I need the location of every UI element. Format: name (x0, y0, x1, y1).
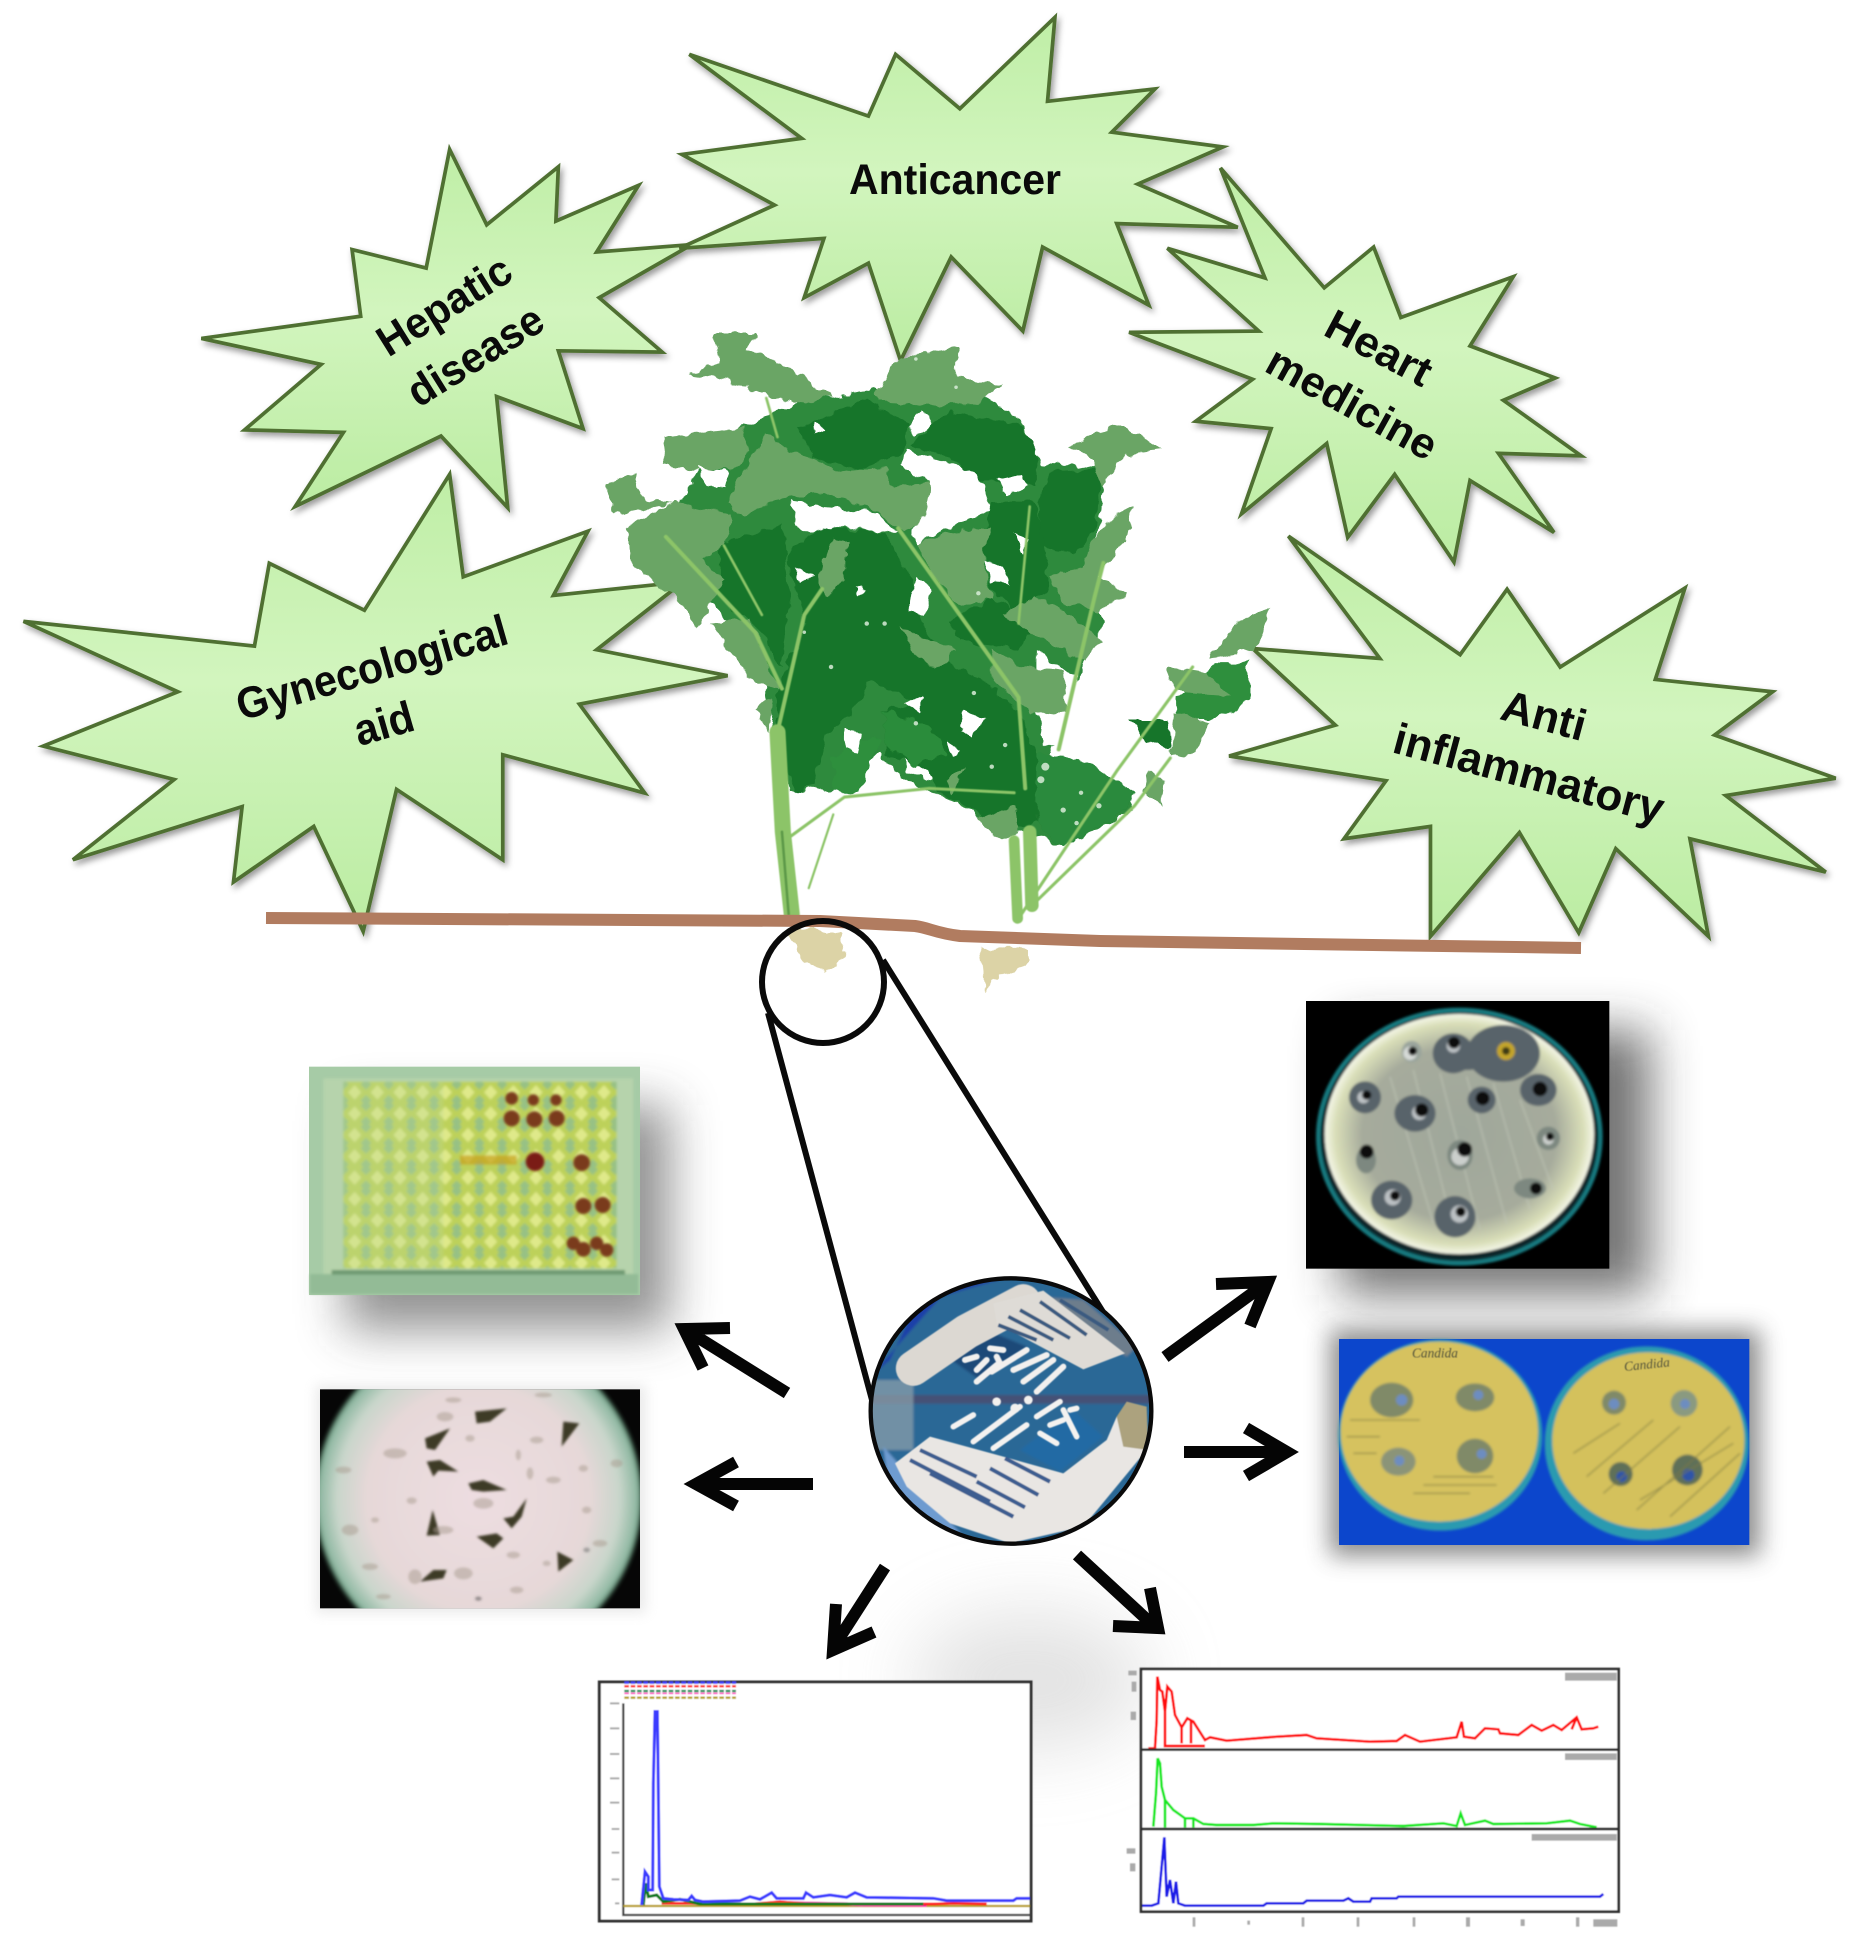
arrow to shrimp assay (696, 1462, 813, 1506)
lens line left (768, 1013, 872, 1400)
starburst: Heart medicine (1129, 168, 1581, 562)
handwritten plate labels (1412, 1345, 1671, 1374)
photo: well plate (309, 1067, 670, 1330)
starburst: Hepatic disease (201, 149, 692, 508)
peak table legend (624, 1683, 736, 1698)
starburst: Anticancer (679, 17, 1238, 361)
starburst: Gynecological aid (23, 474, 728, 931)
label: Heart medicine: Heart (1317, 301, 1440, 397)
starburst: Anti inflammatory (1229, 536, 1836, 936)
zoom lens lines (762, 921, 1103, 1400)
green trace (1153, 1758, 1597, 1827)
label: Hepatic disease: Hepatic (368, 246, 521, 366)
bacterial streaks (913, 1302, 1023, 1368)
label: Gynecological aid: aid (348, 692, 420, 756)
chart: right stacked chromatograms (1127, 1669, 1619, 1927)
label: Anticancer: Anticancer (849, 156, 1061, 204)
plant: open gaps in canopy (791, 450, 1077, 780)
plant: mid green canopy base (657, 372, 1135, 847)
arrow to candida plates (1184, 1428, 1287, 1476)
arrows from culture to assays (684, 1282, 1287, 1650)
plant: dark foliage (719, 398, 1248, 847)
panel: starburst claims (23, 17, 1836, 936)
soil line (266, 918, 1581, 948)
label: Anti inflammatory: Anti (1496, 681, 1592, 751)
red trace (1148, 1677, 1598, 1748)
plant: pale leaves (608, 333, 1271, 836)
plant: stems (666, 398, 1193, 919)
panel frames (1141, 1669, 1619, 1912)
tiny axis labels (1127, 1671, 1617, 1927)
plant illustration (608, 333, 1271, 992)
label: Heart medicine: medicine (1258, 337, 1446, 470)
plant: white gaps in foliage (697, 413, 1032, 758)
chart: left HPLC chromatogram (599, 1682, 1031, 1921)
label: Anti inflammatory: inflammatory (1388, 714, 1670, 834)
dish outline (871, 1278, 1151, 1544)
label: Hepatic disease (368, 246, 553, 417)
plate streaks (1347, 1420, 1740, 1517)
arrow to well plate (684, 1328, 787, 1393)
culture streak lines (1390, 1070, 1553, 1230)
lens line right (883, 960, 1103, 1312)
handwritten plate labels: Candida (1623, 1354, 1671, 1374)
plant: roots (786, 927, 1027, 992)
arrow to agar plate (1165, 1282, 1268, 1357)
blue trace (1141, 1837, 1603, 1906)
sediment specks (335, 1393, 623, 1601)
root lens circle (762, 921, 884, 1043)
plant: light speckles on leaves (802, 357, 1102, 825)
arrow to left chromatogram (833, 1567, 885, 1650)
agar background (872, 1280, 1150, 1542)
label: Hepatic disease: disease (398, 296, 553, 417)
shrimp silhouettes (420, 1408, 579, 1582)
label: Gynecological aid: Gynecological (231, 606, 513, 730)
antifungal halos (1370, 1383, 1703, 1486)
handwritten plate labels: Candida (1412, 1345, 1458, 1360)
background shadow behind charts (910, 1610, 1150, 1750)
dark centre panels (954, 1335, 1026, 1378)
photo: antifungal candida plates (1330, 1330, 1760, 1556)
inhibition zones (1349, 1025, 1560, 1237)
center culture dish (863, 1270, 1163, 1553)
photo: antibacterial agar plate (1306, 1001, 1650, 1295)
arrow to right chromatogram (1077, 1555, 1158, 1628)
photo: brine shrimp under microscope (314, 1384, 648, 1614)
